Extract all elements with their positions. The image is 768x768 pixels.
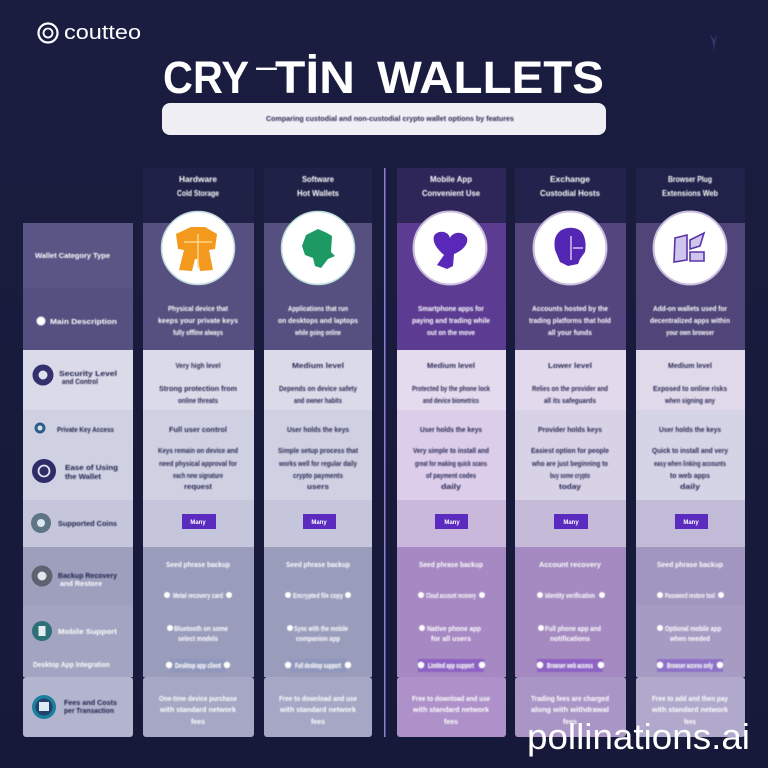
panel: wallet column 5: Seed phrase backup xyxy=(657,562,723,569)
button xyxy=(182,514,216,529)
panel: wallet column 2: Simple setup process that xyxy=(278,448,359,455)
panel: wallet column 3: for all users xyxy=(431,636,471,643)
panel: wallet column 1: with standard network xyxy=(159,707,236,714)
panel: wallet column 3: Mobile App xyxy=(430,174,472,184)
panel: wallet column 3: daily xyxy=(441,484,461,491)
panel: row labels: and Restore xyxy=(60,579,102,588)
panel: row labels: Fees and Costs xyxy=(64,700,117,707)
panel: row labels: Supported Coins xyxy=(58,521,117,528)
panel: wallet column 4: Full phone app and xyxy=(545,626,601,633)
panel: wallet column 5: daily xyxy=(680,484,700,491)
panel: wallet column 3: of payment codes xyxy=(426,473,476,480)
panel: wallet column 4: Trading fees are charged xyxy=(531,696,609,703)
panel: wallet column 5: fees xyxy=(684,719,696,726)
panel: row labels: Main Description xyxy=(50,317,117,326)
panel: wallet column 3: Smartphone apps for xyxy=(418,306,484,313)
panel: wallet column 2: Depends on device safety xyxy=(279,386,357,393)
logo: coutteo xyxy=(64,22,141,44)
panel: wallet column 1: One-time device purchase xyxy=(159,696,237,703)
panel: row labels: Private Key Access xyxy=(57,427,114,434)
panel: wallet column 2: while going online xyxy=(294,330,341,337)
panel: wallet column 1: Physical device that xyxy=(168,306,229,313)
icon: key xyxy=(34,422,46,434)
panel: wallet column 5: Optional mobile app xyxy=(665,626,721,633)
panel: wallet column 1: Bluetooth on some xyxy=(174,626,228,633)
icon: mobile xyxy=(32,621,52,641)
panel: row labels: Desktop App Integration xyxy=(33,660,110,669)
panel: wallet column 1: select models xyxy=(178,636,218,643)
panel: wallet column 5: when signing any xyxy=(664,398,715,405)
panel: wallet column 1: fully offline always xyxy=(173,330,223,337)
panel: wallet column 5: Browser Plug xyxy=(668,174,712,184)
icon: outlined purple wallet xyxy=(654,212,726,284)
icon: faint star xyxy=(710,34,717,52)
panel: wallet column 2: companion app xyxy=(296,636,340,643)
panel: wallet column 3: great for making quick scans xyxy=(415,461,487,468)
panel: wallet column 4: all its safeguards xyxy=(544,398,596,405)
button xyxy=(303,514,336,529)
panel: wallet column 3: Very simple to install and xyxy=(413,448,489,455)
title: TİN xyxy=(275,52,355,103)
panel: wallet column 3: Seed phrase backup xyxy=(419,562,483,569)
title: WALLETS xyxy=(377,52,604,103)
panel: wallet column 1: Seed phrase backup xyxy=(166,562,230,569)
icon: backup xyxy=(32,566,52,586)
panel: wallet column 1: need physical approval for xyxy=(159,461,237,468)
icon: purple heart wallet xyxy=(414,212,486,284)
panel: wallet column 3: fees xyxy=(444,719,458,726)
button: Many xyxy=(444,520,460,526)
icon: user xyxy=(32,459,56,483)
button: Many xyxy=(311,520,327,526)
panel: wallet column 1: Hardware xyxy=(179,174,217,184)
panel: wallet column 4: notifications xyxy=(550,636,590,643)
panel: wallet column 5: Medium level xyxy=(668,363,712,370)
panel: wallet column 2: and owner habits xyxy=(294,398,342,405)
panel: wallet column 3: Native phone app xyxy=(427,626,481,633)
panel: wallet column 2 xyxy=(264,168,372,737)
panel: wallet column 3: Cloud account recovery xyxy=(426,593,476,600)
panel: wallet column 5: when needed xyxy=(669,636,710,643)
panel: wallet column 5: your own browser xyxy=(666,330,714,337)
panel: wallet column 1: fees xyxy=(191,719,205,726)
panel: wallet column 1 xyxy=(143,168,254,737)
panel: wallet column 2: with standard network xyxy=(279,707,356,714)
panel: row labels: the Wallet xyxy=(65,474,102,481)
panel: wallet column 4: Account recovery xyxy=(539,562,601,569)
subtitle bar xyxy=(162,103,606,135)
panel: wallet column 1: Cold Storage xyxy=(177,188,219,198)
panel: wallet column 4: Easiest option for people xyxy=(531,448,609,455)
panel: wallet column 4: Relies on the provider and xyxy=(532,386,608,393)
panel: wallet column 2: Sync with the mobile xyxy=(294,626,348,633)
panel: wallet column 4: trading platforms that hold xyxy=(529,318,611,325)
panel: row labels: Security Level xyxy=(59,371,117,378)
panel: wallet column 5: Free to add and then pay xyxy=(652,696,728,703)
panel: wallet column 3: with standard network xyxy=(412,707,489,714)
panel: row labels: Ease of Using xyxy=(65,465,118,472)
panel: wallet column 3: paying and trading while xyxy=(412,318,490,325)
panel: wallet column 5: Browser access only xyxy=(667,663,713,670)
panel: wallet column 4: buy some crypto xyxy=(550,473,590,480)
panel: wallet column 2: Hot Wallets xyxy=(297,188,339,198)
button: Many xyxy=(190,520,206,526)
panel: wallet column 2: User holds the keys xyxy=(287,427,349,434)
panel: wallet column 3: User holds the keys xyxy=(420,427,482,434)
panel: wallet column 4: who are just beginning to xyxy=(531,461,608,468)
panel: wallet column 5: Exposed to online risks xyxy=(653,386,727,393)
panel: wallet column 4 xyxy=(515,168,626,737)
panel: wallet column 4: all your funds xyxy=(548,330,592,337)
subtitle bar: Comparing custodial and non-custodial crypto wallet options by features xyxy=(266,114,514,123)
panel: wallet column 1: Keys remain on device and xyxy=(158,448,238,455)
panel: wallet column 1: Strong protection from xyxy=(159,386,237,393)
panel: wallet column 3 xyxy=(397,168,506,737)
panel: wallet column 3: Medium level xyxy=(427,363,475,370)
button xyxy=(675,514,708,529)
panel: wallet column 2: Medium level xyxy=(292,363,344,370)
button xyxy=(554,514,588,529)
panel: row labels: per Transaction xyxy=(64,708,114,715)
panel: wallet column 4: Exchange xyxy=(550,174,590,184)
icon: green wallet xyxy=(282,212,354,284)
panel: row labels: Mobile Support xyxy=(58,627,118,636)
panel: row labels: Backup Recovery xyxy=(58,573,117,580)
panel: wallet column 2: Full desktop support xyxy=(295,663,341,670)
panel: wallet column 3: Limited app support xyxy=(428,663,474,670)
panel: wallet column 1: Full user control xyxy=(169,427,227,434)
panel: wallet column 5: easy when linking accounts xyxy=(654,461,726,468)
panel: wallet column 3: Convenient Use xyxy=(422,188,480,198)
button: Many xyxy=(683,520,699,526)
panel: row labels xyxy=(23,223,133,737)
panel: wallet column 1: each new signature xyxy=(173,473,223,480)
logo xyxy=(38,22,141,44)
panel: wallet column 3: out on the move xyxy=(427,330,475,337)
title: CRY xyxy=(163,52,249,103)
panel: wallet column 5 xyxy=(636,168,745,737)
panel: wallet column 5: Password restore tool xyxy=(665,593,715,600)
panel: wallet column 4: Browser web access xyxy=(547,663,593,670)
panel: wallet column 2: crypto payments xyxy=(293,473,343,480)
panel: wallet column 5: Extensions Web xyxy=(662,188,718,198)
icon: purple head wallet xyxy=(534,212,606,284)
panel: wallet column 2: Software xyxy=(302,174,334,184)
panel: wallet column 5: decentralized apps within xyxy=(650,318,730,325)
panel: wallet column 5: Quick to install and very xyxy=(652,448,728,455)
panel: wallet column 5: User holds the keys xyxy=(659,427,721,434)
panel: wallet column 4: fees xyxy=(563,719,577,726)
panel: wallet column 1: Very high level xyxy=(176,363,221,370)
icon: orange wallet xyxy=(162,212,234,284)
panel: wallet column 4: today xyxy=(559,484,581,491)
panel: wallet column 4: Identity verification xyxy=(545,593,595,600)
panel: wallet column 4: Custodial Hosts xyxy=(540,188,600,198)
panel: wallet column 1: Desktop app client xyxy=(175,663,221,670)
panel: wallet column 1: Metal recovery card xyxy=(173,593,223,600)
icon: coins xyxy=(31,513,51,533)
panel: wallet column 5: to web apps xyxy=(670,473,710,480)
panel: wallet column 1: online threats xyxy=(178,398,218,405)
panel: wallet column 4: Provider holds keys xyxy=(538,427,602,434)
panel: wallet column 1: keeps your private keys xyxy=(158,318,238,325)
panel: wallet column 2: Seed phrase backup xyxy=(286,562,350,569)
panel: wallet column 5: Add-on wallets used for xyxy=(653,306,727,313)
panel: wallet column 2: Free to download and use xyxy=(279,696,357,703)
panel: wallet column 5: with standard network xyxy=(651,707,728,714)
icon: shield xyxy=(32,364,54,386)
panel: wallet column 4: Accounts hosted by the xyxy=(532,306,608,313)
panel: wallet column 3: Protected by the phone lock xyxy=(412,386,490,393)
icon: fees xyxy=(32,695,56,719)
panel: wallet column 2: fees xyxy=(311,719,325,726)
panel: wallet column 2: Applications that run xyxy=(288,306,348,313)
divider xyxy=(384,168,386,737)
title: ‾ xyxy=(256,65,277,98)
panel: wallet column 3: and device biometrics xyxy=(423,398,479,405)
panel: wallet column 2: users xyxy=(307,484,329,491)
panel: wallet column 4: Lower level xyxy=(548,363,592,370)
panel: wallet column 4: along with withdrawal xyxy=(531,707,609,714)
panel: wallet column 2: on desktops and laptops xyxy=(278,318,358,325)
panel: wallet column 2: works well for regular daily xyxy=(278,461,357,468)
title xyxy=(163,52,604,103)
button xyxy=(435,514,468,529)
panel: wallet column 2: Encrypted file copy xyxy=(293,593,343,600)
panel: wallet column 3: Free to download and use xyxy=(412,696,490,703)
button: Many xyxy=(563,520,579,526)
panel: wallet column 1: request xyxy=(184,484,213,491)
watermark: pollinations.ai xyxy=(527,716,750,757)
panel: row labels: and Control xyxy=(62,379,98,386)
panel: row labels: Wallet Category Type xyxy=(35,251,110,260)
